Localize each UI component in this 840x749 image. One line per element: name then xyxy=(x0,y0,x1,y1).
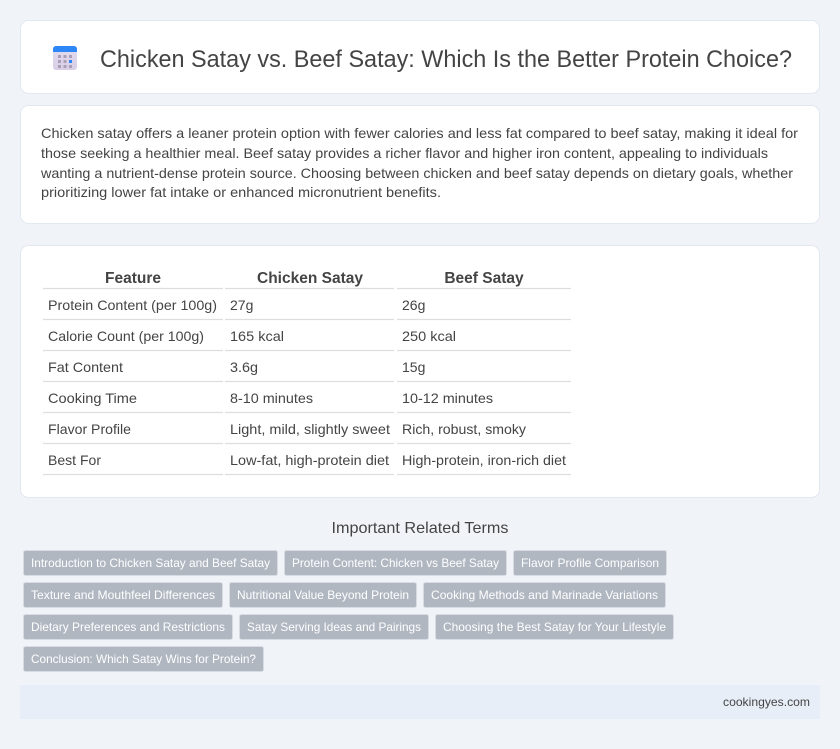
tag: Introduction to Chicken Satay and Beef Satay xyxy=(31,556,270,570)
tag: Protein Content: Chicken vs Beef Satay xyxy=(292,556,499,570)
tag: Cooking Methods and Marinade Variations xyxy=(431,588,658,602)
table header: Chicken Satay xyxy=(257,270,363,287)
row: flavor profile: Flavor Profile xyxy=(48,421,131,437)
text block: summary: Chicken satay offers a leaner protein option with fewer calories and less fat compared to beef satay, making it ideal for xyxy=(41,125,798,141)
row: fat content: 3.6g xyxy=(230,359,258,375)
tag: Choosing the Best Satay for Your Lifestyle xyxy=(443,620,666,634)
row: best for xyxy=(48,452,566,468)
table header: Feature xyxy=(105,270,161,287)
tag: Flavor Profile Comparison xyxy=(521,556,659,570)
tag xyxy=(24,646,264,672)
row: calorie count: 250 kcal xyxy=(402,328,456,344)
row: protein content: Protein Content (per 100g) xyxy=(48,297,217,313)
tag xyxy=(284,550,506,576)
row: cooking time: 10-12 minutes xyxy=(402,390,493,406)
tag: Satay Serving Ideas and Pairings xyxy=(247,620,421,634)
tag xyxy=(230,582,416,608)
row: flavor profile: Rich, robust, smoky xyxy=(402,421,526,437)
panel: header xyxy=(20,20,820,94)
text block: summary: wanting a nutrient-dense protein source. Choosing between chicken and beef satay depends on dietary goals, whether xyxy=(40,165,793,181)
row: flavor profile: Light, mild, slightly sweet xyxy=(230,421,390,437)
row: protein content: 27g xyxy=(230,297,253,313)
text block: summary: prioritizing lower fat intake or enhanced micronutrient benefits. xyxy=(41,184,441,200)
row: flavor profile xyxy=(48,421,526,437)
tag xyxy=(240,614,428,640)
row: protein content: 26g xyxy=(402,297,425,313)
tag: Conclusion: Which Satay Wins for Protein? xyxy=(31,652,256,666)
table header: Beef Satay xyxy=(444,270,524,287)
row: fat content: 15g xyxy=(402,359,425,375)
tag: Nutritional Value Beyond Protein xyxy=(237,588,409,602)
row: cooking time: Cooking Time xyxy=(48,390,137,406)
tag xyxy=(24,550,278,576)
row: best for: High-protein, iron-rich diet xyxy=(402,452,566,468)
table header xyxy=(105,270,524,287)
tag xyxy=(436,614,674,640)
row: protein content xyxy=(48,297,425,313)
tag xyxy=(424,582,666,608)
text block: summary: those seeking a healthier meal. Beef satay provides a richer flavor and higher iron content, appealing to individuals xyxy=(41,145,768,161)
row: fat content xyxy=(48,359,425,375)
tag xyxy=(24,582,222,608)
footer xyxy=(20,685,820,719)
row: fat content: Fat Content xyxy=(48,359,123,375)
text block: summary xyxy=(40,125,798,200)
tag xyxy=(24,614,232,640)
panel: introduction xyxy=(20,106,820,224)
row: calorie count: Calorie Count (per 100g) xyxy=(48,328,204,344)
title: Chicken Satay vs. Beef Satay: Which Is the Better Protein Choice? xyxy=(100,46,792,73)
heading: related terms: Important Related Terms xyxy=(332,520,508,537)
row: cooking time xyxy=(48,390,493,406)
row: calorie count: 165 kcal xyxy=(230,328,284,344)
footer: cookingyes.com xyxy=(723,695,810,709)
tag xyxy=(514,550,666,576)
tag: Dietary Preferences and Restrictions xyxy=(31,620,225,634)
panel: comparison table xyxy=(20,246,820,498)
row: best for: Best For xyxy=(48,452,101,468)
row: best for: Low-fat, high-protein diet xyxy=(230,452,389,468)
tag list: related terms xyxy=(24,550,674,672)
row: calorie count xyxy=(48,328,456,344)
tag: Texture and Mouthfeel Differences xyxy=(31,588,215,602)
icon: calendar xyxy=(53,46,77,70)
row: cooking time: 8-10 minutes xyxy=(230,390,313,406)
